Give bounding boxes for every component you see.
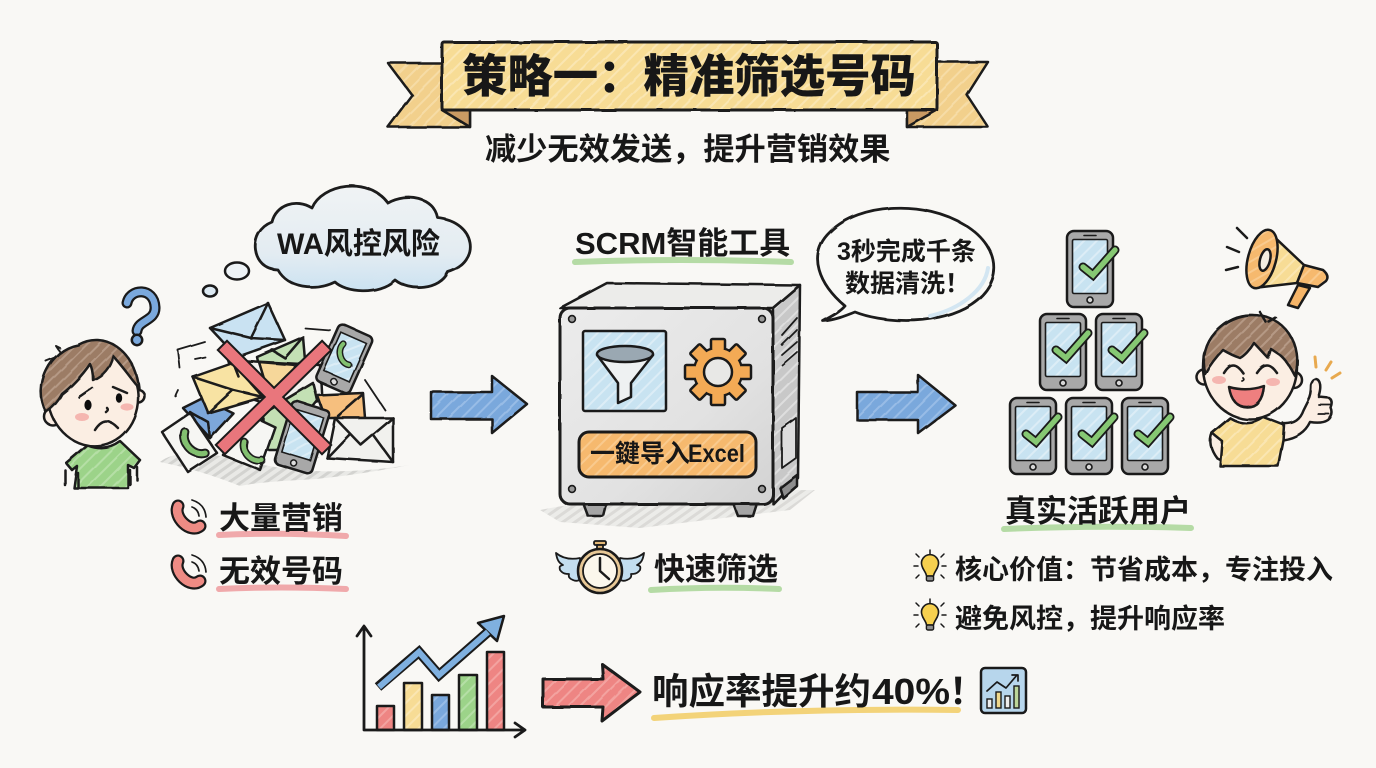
icon: gear <box>685 339 751 405</box>
label: mass marketing: 大量营销 <box>219 501 343 536</box>
speech bubble <box>818 208 994 321</box>
tool heading: SCRM智能工具 <box>575 226 790 261</box>
result text: 40% <box>872 671 950 712</box>
result text: ！ <box>949 671 986 712</box>
icon: small chart <box>981 668 1026 713</box>
result text <box>652 671 986 718</box>
arrow: tool to users <box>857 375 955 433</box>
panel: active users <box>914 226 1340 634</box>
panel: result <box>357 616 1026 737</box>
label: fast filtering <box>556 541 779 593</box>
benefit two: 避免风控，提升响应率 <box>955 604 1225 634</box>
phone pyramid <box>1010 231 1170 474</box>
arrow: problem to tool <box>431 376 527 433</box>
banner ribbon <box>388 42 988 127</box>
button: import Excel: Excel <box>688 440 745 468</box>
arrow: red <box>543 664 640 721</box>
bubble text: WA风控风险 <box>277 228 440 261</box>
bar chart <box>357 616 525 737</box>
button: import Excel <box>579 432 756 477</box>
speech bubble: 数据清洗！ <box>845 270 970 298</box>
users heading: 真实活跃用户 <box>1005 494 1191 529</box>
thought bubble <box>203 186 470 296</box>
red cross <box>225 350 322 445</box>
icon: winged stopwatch <box>556 541 644 593</box>
panel: problem <box>41 186 470 589</box>
button: import Excel: 一鍵导入 <box>590 440 690 468</box>
benefit one: 核心价值：节省成本，专注投入 <box>955 555 1333 585</box>
sparkle lines <box>1315 357 1340 378</box>
subtitle: 减少无效发送，提升营销效果 <box>485 132 890 167</box>
pile of envelopes and phones <box>160 303 410 486</box>
result text: 响应率提升约 <box>652 671 871 712</box>
title text: 策略一：精准筛选号码 <box>462 51 916 102</box>
icon: funnel <box>583 331 666 411</box>
speech bubble: 3秒完成千条 <box>837 238 976 266</box>
label: invalid numbers: 无效号码 <box>219 554 343 589</box>
title banner <box>388 42 988 127</box>
happy boy <box>1196 312 1332 466</box>
icon: megaphone <box>1226 226 1327 308</box>
shadow <box>160 454 410 486</box>
panel: SCRM tool <box>540 208 994 593</box>
sad boy <box>41 340 145 488</box>
question mark <box>127 292 155 345</box>
machine <box>540 283 815 528</box>
label: fast filtering: 快速筛选 <box>654 552 778 587</box>
